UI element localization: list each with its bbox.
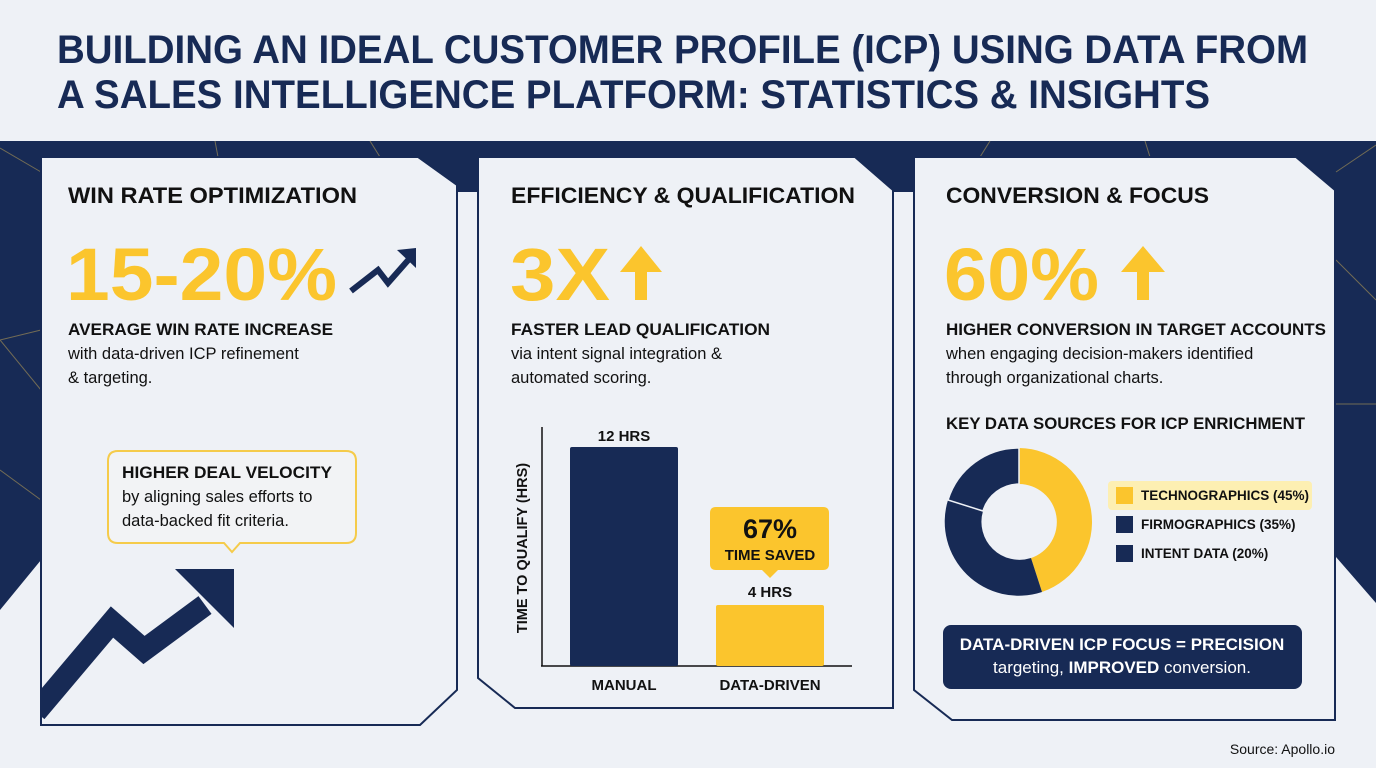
- title: A SALES INTELLIGENCE PLATFORM: STATISTICS & INSIGHTS: [57, 73, 1210, 117]
- text: faster lead qualification: automated scoring.: [511, 369, 651, 387]
- icon: up arrow: [620, 246, 662, 300]
- callout: 67% time saved: [710, 507, 829, 578]
- text: higher conversion: [945, 321, 1326, 387]
- legend: FIRMOGRAPHICS (35%): [1141, 517, 1296, 532]
- big stat 3X: 3X: [510, 233, 610, 316]
- panel: win rate optimization: [36, 157, 457, 725]
- callout: data-driven icp focus: targeting, IMPROVED conversion.: [993, 658, 1251, 677]
- panel: efficiency & qualification: [478, 157, 893, 708]
- legend: TECHNOGRAPHICS (45%): [1141, 488, 1309, 503]
- text: faster lead qualification: via intent signal integration &: [511, 345, 722, 363]
- panel: conversion & focus: [914, 157, 1335, 720]
- text: average win rate increase: with data-driven ICP refinement: [67, 345, 299, 363]
- text: faster lead qualification: [511, 321, 770, 387]
- callout: 67% time saved: TIME SAVED: [725, 547, 815, 564]
- heading: win rate optimization: WIN RATE OPTIMIZATION: [68, 183, 357, 208]
- icon: large growth arrow: [36, 569, 234, 712]
- icon: up arrow: [1121, 246, 1165, 300]
- donut chart: [945, 448, 1092, 596]
- bar chart: time to qualify: MANUAL: [592, 677, 656, 694]
- legend: [1108, 481, 1312, 562]
- text: faster lead qualification: FASTER LEAD QUALIFICATION: [511, 321, 770, 339]
- heading: conversion & focus: CONVERSION & FOCUS: [946, 183, 1209, 208]
- text: average win rate increase: & targeting.: [68, 369, 152, 387]
- bar chart: time to qualify: 12 HRS: [598, 428, 650, 445]
- source note: Source: Apollo.io: [1230, 741, 1335, 757]
- callout: 67% time saved: 67%: [743, 514, 797, 544]
- callout: higher deal velocity: [108, 451, 356, 552]
- title: BUILDING AN IDEAL CUSTOMER PROFILE (ICP) USING DATA FROM: [57, 28, 1308, 72]
- bar chart: time to qualify: DATA-DRIVEN: [719, 677, 821, 694]
- text: higher conversion: through organizational charts.: [946, 369, 1163, 387]
- icon: small trend arrow: [351, 248, 416, 291]
- callout: higher deal velocity: data-backed fit criteria.: [122, 512, 289, 530]
- text: average win rate increase: AVERAGE WIN RATE INCREASE: [68, 321, 333, 339]
- bar chart: time to qualify: TIME TO QUALIFY (HRS): [515, 463, 531, 633]
- big stat 60%: 60%: [944, 233, 1099, 316]
- callout: higher deal velocity: HIGHER DEAL VELOCITY: [122, 464, 332, 482]
- text: higher conversion: HIGHER CONVERSION IN TARGET ACCOUNTS: [946, 321, 1326, 339]
- text: higher conversion: when engaging decision-makers identified: [945, 345, 1253, 363]
- heading: key data sources: KEY DATA SOURCES FOR ICP ENRICHMENT: [946, 415, 1305, 433]
- callout: higher deal velocity: by aligning sales efforts to: [122, 488, 312, 506]
- title: [57, 28, 1308, 117]
- bar chart: time to qualify: [515, 427, 852, 694]
- legend: INTENT DATA (20%): [1141, 546, 1268, 561]
- heading: efficiency: EFFICIENCY & QUALIFICATION: [511, 183, 855, 208]
- callout: data-driven icp focus: [943, 625, 1302, 689]
- text: average win rate increase: [67, 321, 333, 387]
- callout: data-driven icp focus: DATA-DRIVEN ICP FOCUS = PRECISION: [960, 635, 1284, 654]
- big stat 15-20%: 15-20%: [66, 233, 337, 316]
- bar chart: time to qualify: 4 HRS: [748, 584, 792, 601]
